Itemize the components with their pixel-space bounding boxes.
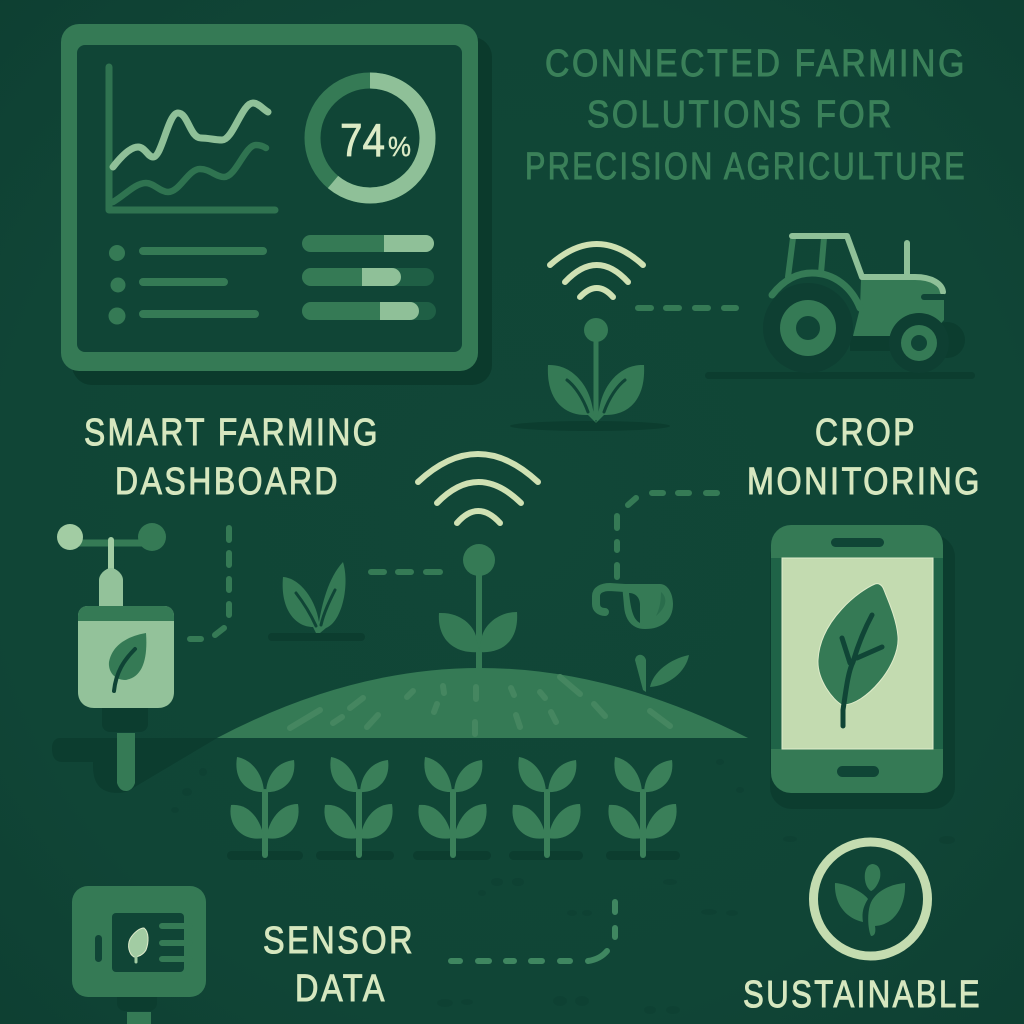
arrow: dashed link monitoring to spout — [617, 493, 717, 577]
line chart — [109, 67, 275, 210]
panel: smart farming dashboard — [61, 24, 492, 385]
icon: central sensor plant with wifi — [418, 454, 538, 670]
progress bars — [302, 235, 436, 320]
arrow: dashed link sensor to tractor — [638, 305, 736, 311]
label: crop monitoring: MONITORING — [747, 461, 982, 503]
crop plant 4 — [512, 757, 581, 855]
title: CONNECTED FARMING — [545, 43, 967, 85]
icon: tractor — [705, 236, 975, 379]
label: smart farming dashboard: DASHBOARD — [115, 461, 340, 503]
icon: sprout — [268, 562, 365, 641]
crop shadows — [227, 851, 680, 860]
label: crop monitoring — [747, 412, 982, 503]
label: sensor data: SENSOR — [263, 920, 415, 962]
title: SOLUTIONS FOR — [587, 94, 894, 136]
label: sensor data: DATA — [295, 968, 387, 1010]
icon: small hill sprout — [635, 655, 689, 692]
icon: field sensor box — [72, 886, 206, 1024]
label: smart farming dashboard — [84, 412, 380, 503]
hill — [217, 668, 748, 738]
arrow: dashed link weather sensor — [190, 528, 229, 639]
arrow: dashed link sensor data — [451, 902, 615, 961]
crop row — [227, 757, 680, 860]
donut gauge 74% — [312, 80, 428, 196]
arrow: dashed link to central sensor — [371, 569, 440, 575]
icon: irrigation spout — [596, 584, 673, 629]
icon: weather station sensor — [57, 523, 174, 791]
donut gauge 74%: % — [388, 131, 411, 162]
title — [525, 43, 967, 188]
crop plant 3 — [418, 757, 487, 855]
label: sensor data — [263, 920, 415, 1010]
label: crop monitoring: CROP — [815, 412, 917, 454]
ground shadow — [52, 738, 217, 793]
soil speckles — [171, 759, 955, 1014]
donut gauge 74%: 74 — [340, 114, 385, 166]
icon: crop sensor with wifi — [510, 244, 670, 431]
icon: sustainable badge — [814, 842, 928, 956]
label: smart farming dashboard: SMART FARMING — [84, 412, 380, 454]
crop plant 2 — [324, 757, 393, 855]
crop plant 1 — [230, 757, 299, 855]
crop plant 5 — [608, 757, 677, 855]
status list — [108, 245, 263, 324]
icon: phone with leaf — [770, 525, 955, 809]
